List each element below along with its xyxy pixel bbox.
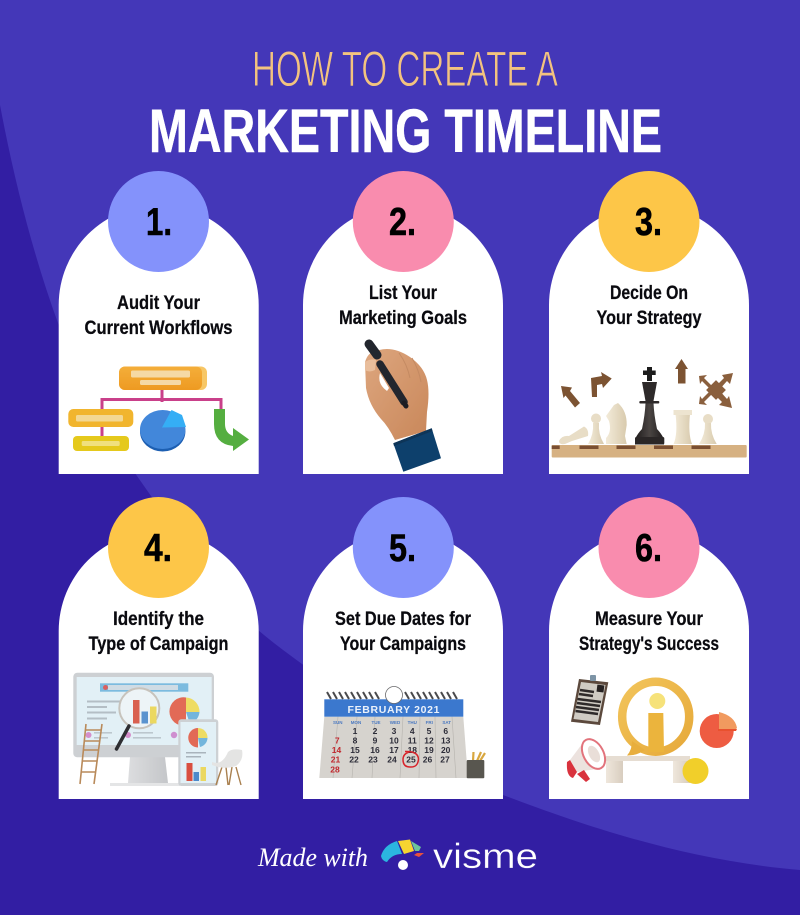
step number: 5. [389,527,416,570]
icon: wall calendar: 26 [423,754,432,764]
step number: 1. [146,201,172,244]
icon: wall calendar: 18 [408,745,417,755]
icon: wall calendar: FRI [426,720,433,725]
icon: wall calendar [319,686,485,778]
icon: wall calendar: 28 [330,764,340,774]
icon: wall calendar: 4 [410,726,415,736]
step label: List Your [369,283,438,304]
panel: step 3 strategy [549,171,749,474]
card shape [549,205,749,474]
icon: wall calendar: 14 [332,745,341,755]
card shape [59,205,259,474]
panel: step 6 measure success [549,497,749,799]
step label [88,609,228,655]
icon: wall calendar: MON [351,720,361,725]
step label: Audit Your [117,293,201,314]
step number: 3. [635,201,662,244]
step label: Decide On [610,283,688,304]
icon: wall calendar: 19 [424,745,434,755]
icon: wall calendar: 3 [392,726,397,736]
step label [335,609,472,655]
icon: wall calendar: 12 [424,736,434,746]
icon: wall calendar: 11 [408,736,417,746]
step number: 6. [635,527,662,570]
title line 1: HOW TO CREATE A [252,41,558,97]
icon: wall calendar: 17 [389,745,399,755]
step label [84,293,232,339]
card shape [59,531,259,799]
step label: Identify the [113,609,204,630]
step label: Set Due Dates for [335,609,472,630]
icon: wall calendar: TUE [372,720,380,725]
step label: Type of Campaign [88,634,228,655]
footer branding [257,837,538,876]
step label [339,283,467,329]
icon: wall calendar: 2 [373,726,378,736]
icon: hand holding pen [365,344,441,472]
number badge [353,497,454,598]
panel: step 2 marketing goals [303,171,503,474]
icon: wall calendar: 27 [440,754,450,764]
icon: wall calendar: 23 [368,754,378,764]
icon: wall calendar: WED [390,720,401,725]
step number: 2. [389,201,416,244]
icon: wall calendar: 24 [387,754,397,764]
step label: Your Campaigns [340,634,466,655]
number badge [353,171,454,272]
step label [579,609,719,655]
step number: 4. [144,527,172,570]
title [149,41,662,165]
panel: step 5 due dates [303,497,503,799]
icon: chess pieces and arrows [552,359,747,458]
number badge [108,171,209,272]
panel: step 4 campaign type [59,497,259,799]
icon: red date circle [403,751,418,767]
icon: wall calendar: FEBRUARY 2021 [348,704,440,716]
step label: Marketing Goals [339,308,467,329]
step label: Strategy's Success [579,634,719,655]
number badge [108,497,209,598]
icon: monitor with charts [73,673,242,786]
step label: Measure Your [595,609,704,630]
icon: wall calendar: 5 [427,726,432,736]
step label [596,283,702,329]
card shape [303,205,503,474]
icon: wall calendar: 13 [441,736,451,746]
icon: wall calendar: 6 [443,726,448,736]
number badge [598,171,700,272]
card shape [549,531,749,799]
icon: visme logo [381,840,424,870]
card shape [303,531,503,799]
icon: wall calendar: 21 [331,754,340,764]
made with text: Made with [257,843,368,872]
icon: wall calendar: SUN [333,720,342,725]
visme wordmark: visme [433,837,538,876]
icon: info bubble, report, pie, megaphone [567,675,737,784]
icon: wall calendar: 8 [353,736,358,746]
icon: wall calendar: 9 [373,736,378,746]
icon: wall calendar: 16 [370,745,380,755]
icon: pencil cup [467,752,485,778]
icon: wall calendar: 10 [389,736,399,746]
panel: step 1 audit workflows [59,171,259,474]
icon: wall calendar: 15 [350,745,360,755]
icon: wall calendar: 1 [353,726,358,736]
icon: wall calendar: 22 [349,754,359,764]
step label: Current Workflows [84,318,232,339]
icon: org chart with pie and arrow [68,366,249,452]
title line 2: MARKETING TIMELINE [149,97,662,165]
icon: wall calendar: 20 [441,745,451,755]
icon: wall calendar: 7 [335,736,340,746]
number badge [598,497,700,598]
icon: wall calendar: 25 [406,754,416,764]
step label: Your Strategy [596,308,702,329]
icon: wall calendar: SAT [442,720,451,725]
icon: wall calendar: THU [408,720,417,725]
